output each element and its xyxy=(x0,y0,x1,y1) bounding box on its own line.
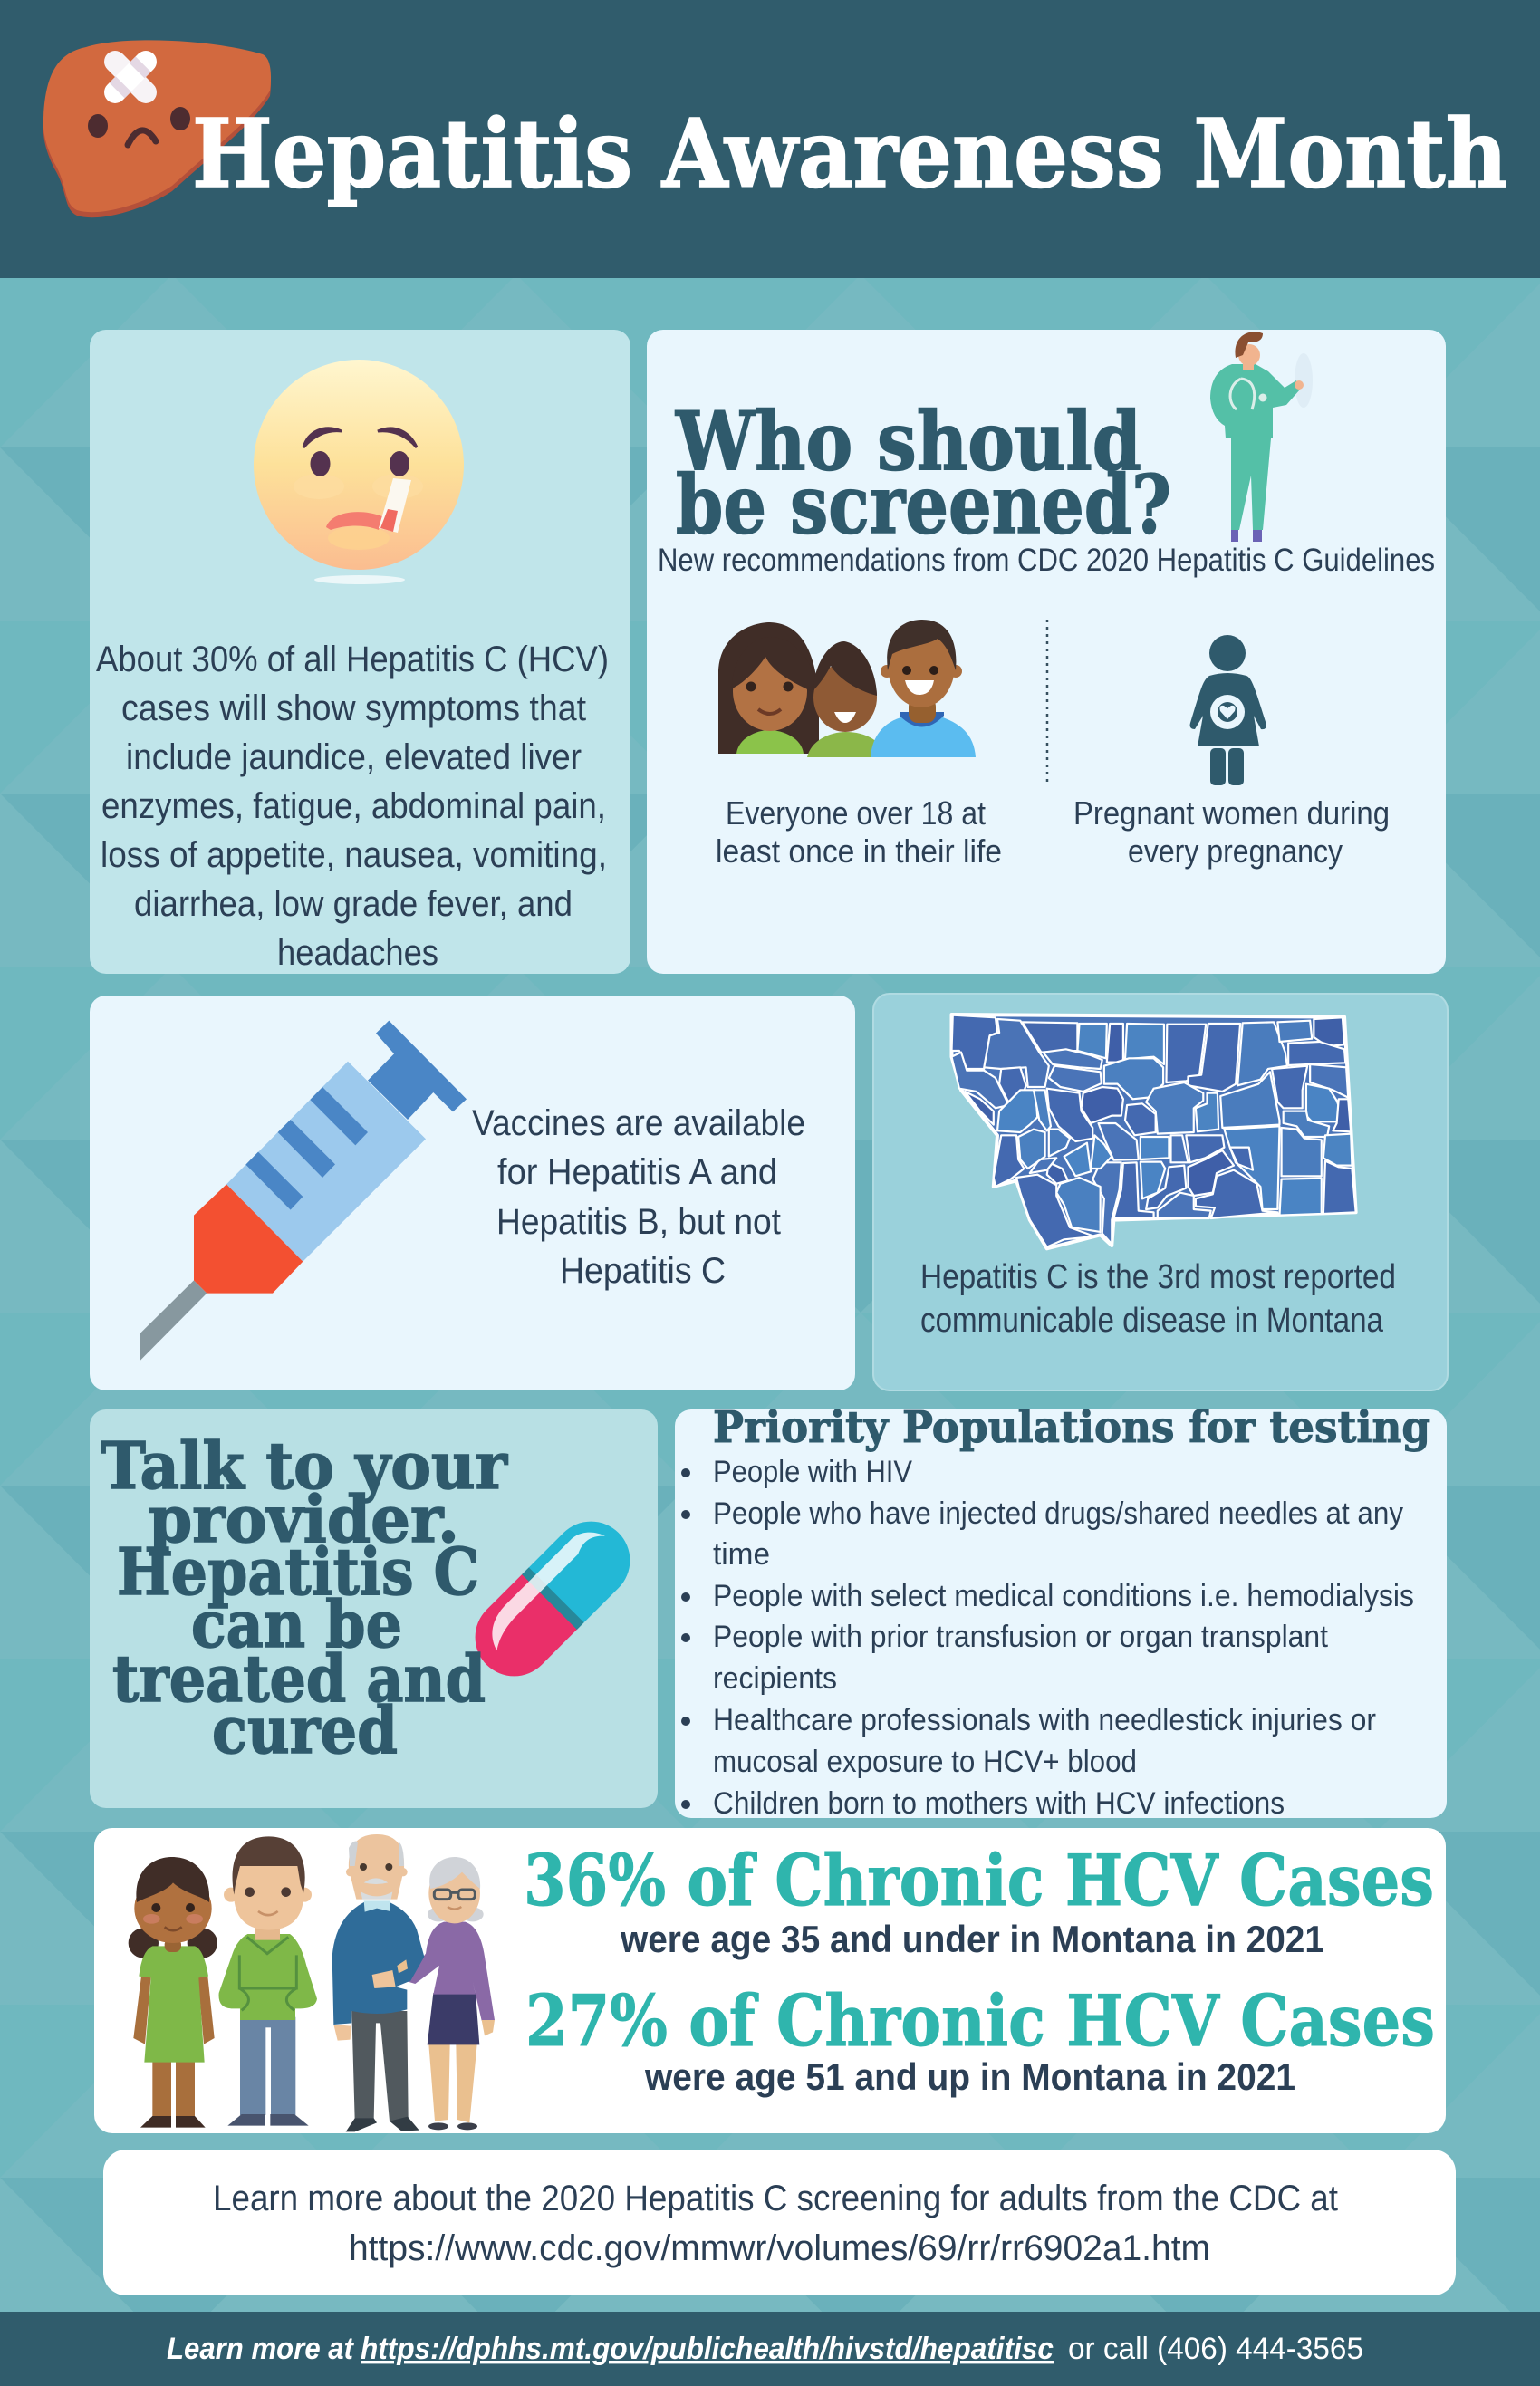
list: priority population bullets: mucosal exposure to HCV+ blood xyxy=(713,1745,1137,1779)
panel: Montana map xyxy=(873,994,1448,1390)
icon: pill capsule xyxy=(459,1506,646,1692)
list: priority population bullets: People who have injected drugs/shared needles at any xyxy=(713,1496,1403,1531)
list: priority population bullets: Children born to mothers with HCV infections xyxy=(713,1786,1285,1821)
text: everyone over 18: Everyone over 18 at xyxy=(726,794,986,832)
text: talk to your provider: can be xyxy=(191,1586,402,1662)
footer band xyxy=(0,2312,1540,2386)
list: priority population bullets: time xyxy=(713,1537,770,1572)
text: vaccines: Hepatitis B, but not xyxy=(496,1202,781,1242)
stat: 27 percent: were age 51 and up in Montana in 2021 xyxy=(644,2055,1295,2098)
list: priority population bullets: People with HIV xyxy=(713,1455,912,1489)
list: priority population bullets: recipients xyxy=(713,1661,837,1696)
panel: talk to your provider xyxy=(90,1409,658,1808)
text: CDC link: Learn more about the 2020 Hepatitis C screening for adults from the CDC at xyxy=(213,2179,1338,2218)
text: symptoms description: enzymes, fatigue, abdominal pain, xyxy=(101,786,606,826)
panel: chronic HCV statistics xyxy=(94,1828,1446,2133)
text: vaccines: for Hepatitis A and xyxy=(497,1152,777,1192)
footer text: https://dphhs.mt.gov/publichealth/hivstd/hepatitisc xyxy=(361,2332,1054,2366)
text: CDC link: https://www.cdc.gov/mmwr/volumes/69/rr/rr6902a1.htm xyxy=(349,2228,1210,2268)
text: symptoms description: About 30% of all Hepatitis C (HCV) xyxy=(96,640,609,679)
text: symptoms description: headaches xyxy=(277,933,438,973)
panel: priority populations xyxy=(675,1402,1447,1821)
panel: who should be screened xyxy=(647,330,1446,974)
footer text xyxy=(167,2332,1363,2366)
icon: family xyxy=(718,620,976,757)
text: talk to your provider: Hepatitis C xyxy=(117,1534,479,1610)
footer text: or call (406) 444-3565 xyxy=(1068,2332,1363,2366)
header band xyxy=(0,0,1540,278)
text: symptoms description: cases will show symptoms that xyxy=(121,688,586,728)
text: symptoms description: loss of appetite, nausea, vomiting, xyxy=(101,835,607,875)
stat: 27 percent xyxy=(525,1980,1435,2098)
illustration: four people of different ages xyxy=(129,1834,495,2131)
list: priority population bullets xyxy=(681,1455,1414,1821)
heading: Who should xyxy=(675,393,1141,488)
old woman xyxy=(405,1857,495,2130)
icon: sick face with thermometer xyxy=(254,360,464,584)
icon: pregnant woman xyxy=(1190,635,1266,785)
text: symptoms description: diarrhea, low grade fever, and xyxy=(134,884,573,924)
stat: 36 percent xyxy=(524,1840,1434,1960)
young man xyxy=(219,1836,317,2126)
list: priority population bullets: People with prior transfusion or organ transplant xyxy=(713,1620,1329,1654)
text: pregnant women xyxy=(1073,794,1390,870)
list: priority population bullets: People with select medical conditions i.e. hemodialysis xyxy=(713,1579,1414,1613)
map: Montana counties xyxy=(951,1015,1356,1248)
text: talk to your provider: cured xyxy=(212,1692,398,1768)
heading xyxy=(675,393,1171,552)
heading: be screened? xyxy=(676,457,1171,552)
text: talk to your provider: provider. xyxy=(149,1481,459,1557)
stat: 36 percent: were age 35 and under in Montana in 2021 xyxy=(620,1918,1324,1960)
text: vaccines: Hepatitis C xyxy=(560,1251,726,1291)
text: 3rd most reported: Hepatitis C is the 3rd most reported xyxy=(920,1258,1396,1296)
text: CDC link xyxy=(213,2179,1338,2268)
heading: priority populations: Priority Populations for testing xyxy=(713,1402,1430,1453)
text: 3rd most reported: communicable disease in Montana xyxy=(920,1302,1384,1340)
text: symptoms description: include jaundice, elevated liver xyxy=(126,737,582,777)
divider dotted line xyxy=(1046,620,1048,782)
icon: sad liver with bandage xyxy=(43,40,271,217)
text: everyone over 18: least once in their life xyxy=(716,832,1002,870)
text: everyone over 18 xyxy=(716,794,1002,870)
text: talk to your provider: treated and xyxy=(112,1640,486,1717)
text: pregnant women: Pregnant women during xyxy=(1073,794,1390,832)
girl xyxy=(129,1857,217,2128)
icon: doctor xyxy=(1210,332,1313,542)
text: 3rd most reported xyxy=(920,1258,1396,1340)
text: pregnant women: every pregnancy xyxy=(1128,832,1343,870)
text: talk to your provider: Talk to your xyxy=(101,1428,509,1504)
text: talk to your provider xyxy=(101,1428,509,1768)
text: vaccines: Vaccines are available xyxy=(472,1103,805,1143)
subheading: New recommendations from CDC 2020 Hepatitis C Guidelines xyxy=(658,543,1435,578)
footer text: Learn more at xyxy=(167,2332,355,2366)
text: symptoms description xyxy=(96,640,609,973)
old man xyxy=(332,1834,424,2131)
panel: symptoms xyxy=(90,330,630,974)
list: priority population bullets: Healthcare professionals with needlestick injuries or xyxy=(713,1703,1376,1737)
panel: learn more from the CDC xyxy=(103,2150,1456,2295)
text: vaccines xyxy=(472,1103,805,1291)
icon: syringe xyxy=(140,1021,467,1361)
panel: vaccines xyxy=(90,996,855,1390)
